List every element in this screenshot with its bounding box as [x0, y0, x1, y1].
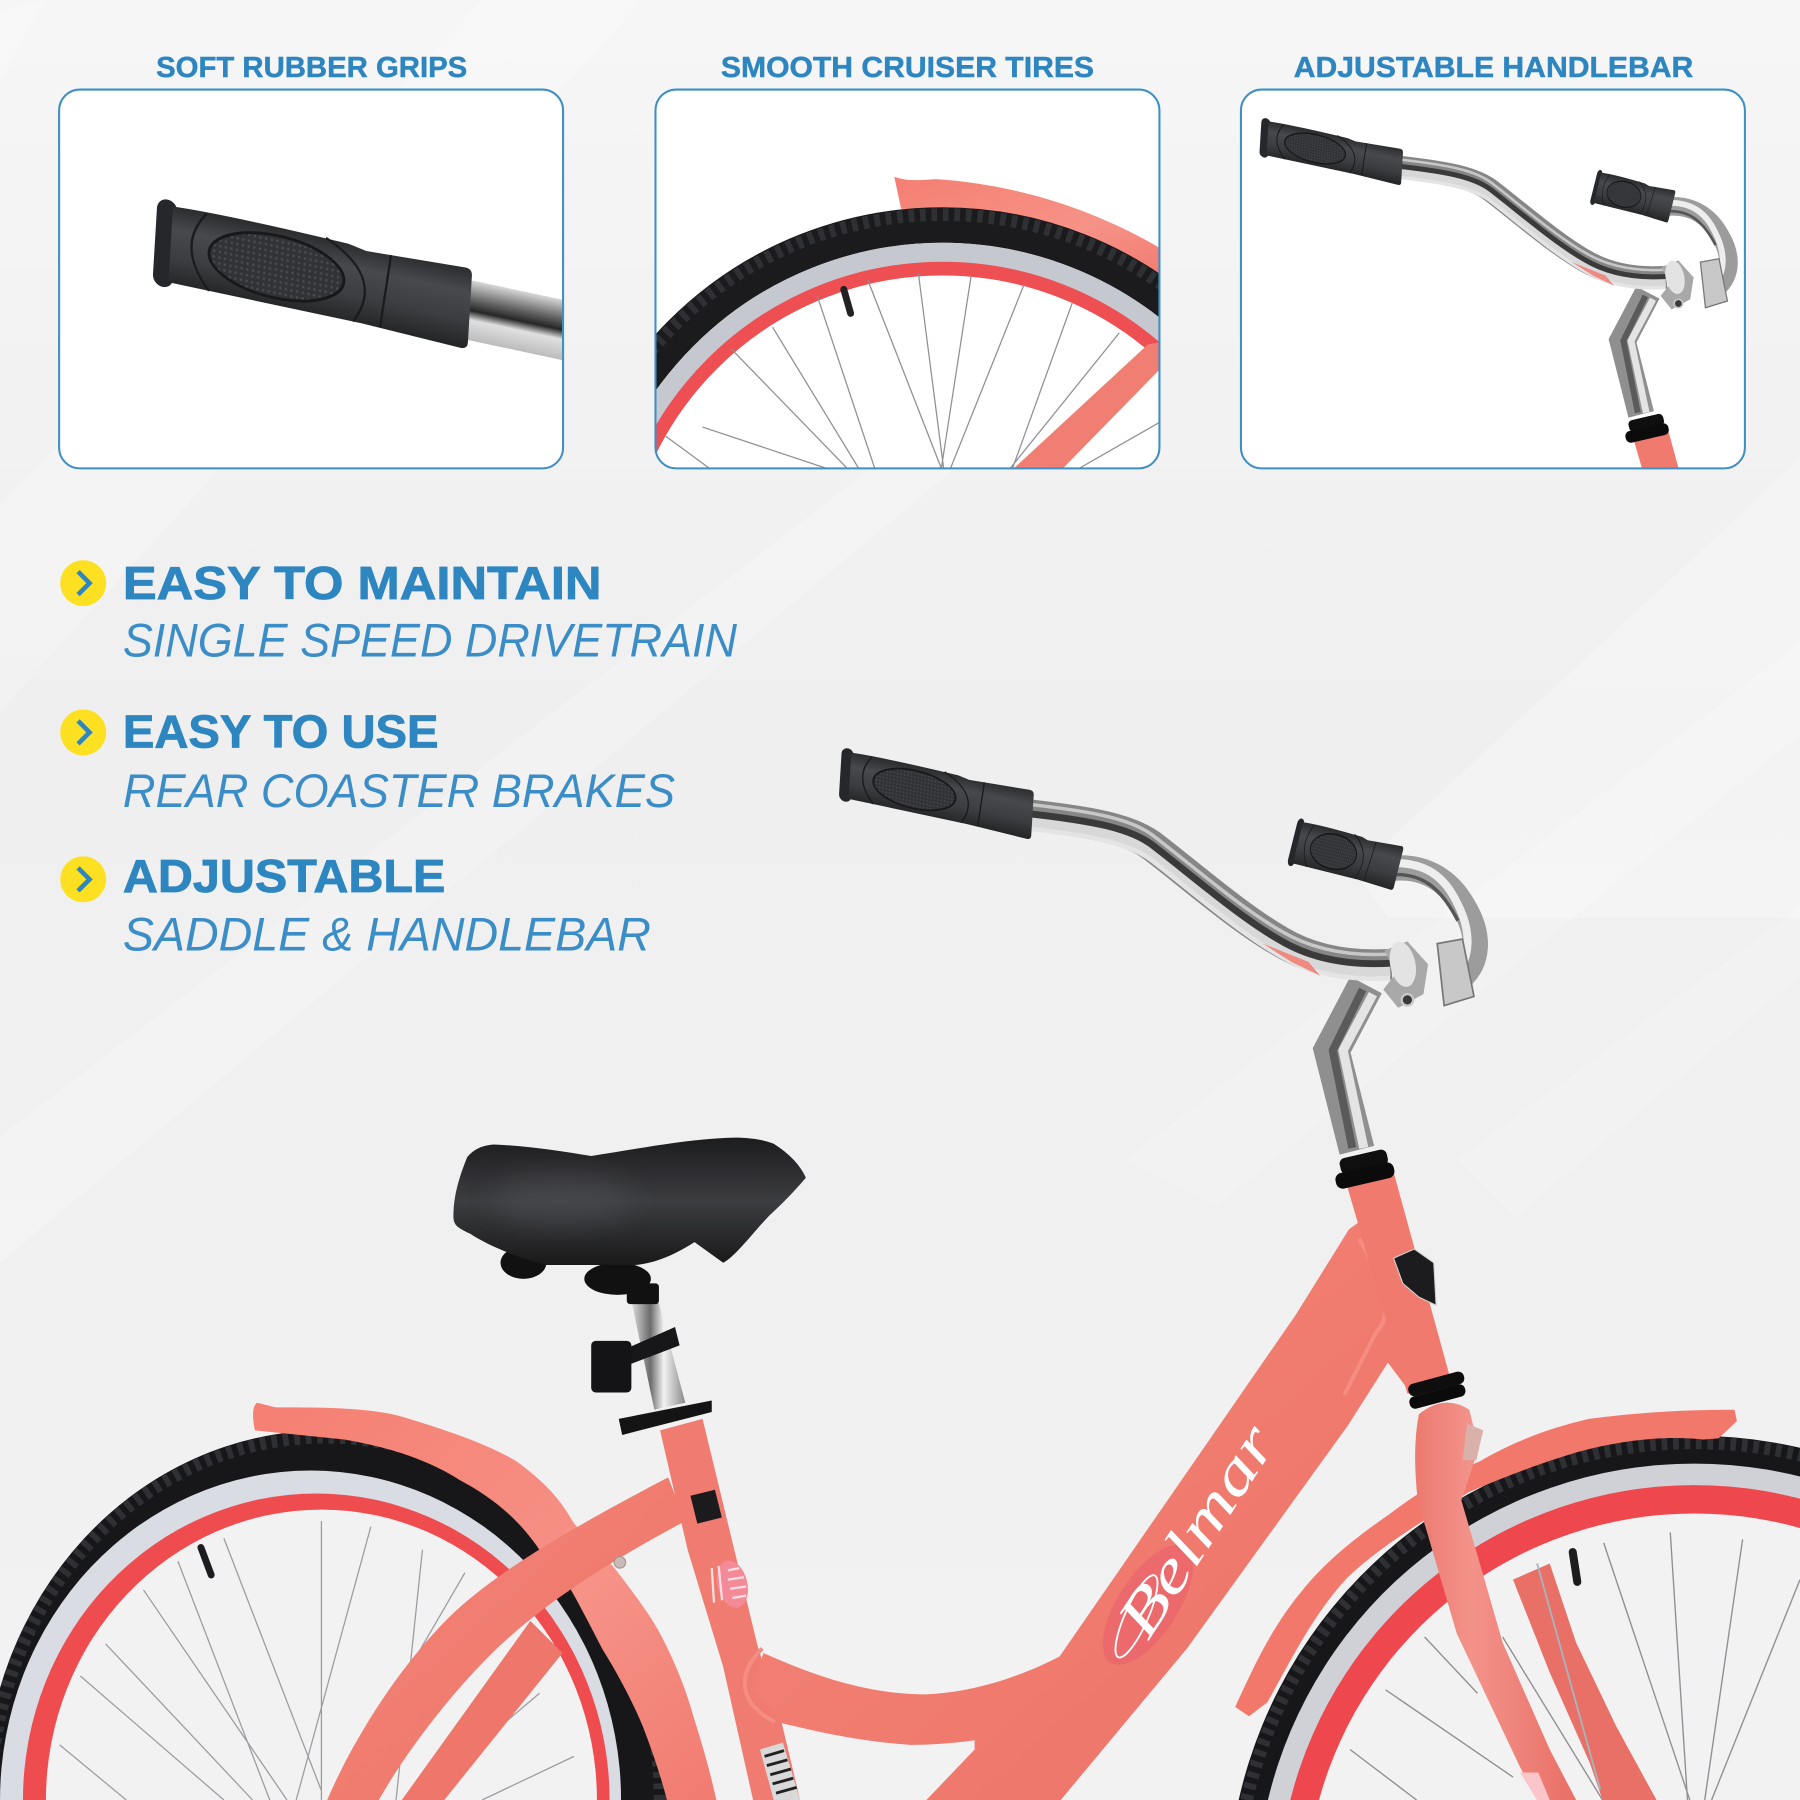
frame tube close-up: [1011, 342, 1162, 471]
logo: [1085, 1412, 1289, 1679]
head tube and handlebar: [839, 747, 1475, 1394]
rear reflector: [591, 1341, 631, 1392]
saddle sheen: [494, 1174, 631, 1225]
handlebar close-up: [1259, 117, 1728, 594]
feature: easy to use: EASY TO USE: [123, 705, 439, 757]
front fork leg: [1415, 1403, 1576, 1800]
heading: soft rubber grips: SOFT RUBBER GRIPS: [156, 52, 467, 84]
front wheel: [1239, 1436, 1800, 1800]
rear spokes: [60, 1521, 574, 1800]
icon: chevron bullet: [60, 709, 106, 755]
feature: easy to use: [60, 705, 675, 817]
seat tube: [660, 1419, 800, 1800]
front spokes: [1350, 1533, 1800, 1800]
grip close-up: [152, 197, 473, 352]
heading: adjustable handlebar: ADJUSTABLE HANDLEBAR: [1294, 52, 1694, 84]
fork bracket: [1462, 1423, 1483, 1460]
lower headset ring: [1407, 1370, 1467, 1410]
tire close-up: [656, 207, 1158, 390]
seat stay: [327, 1477, 685, 1800]
saddle: [453, 1138, 806, 1265]
safety label: [760, 1743, 800, 1800]
logo: Belmar: [1104, 1412, 1289, 1649]
valve stem: [844, 289, 851, 313]
feature: easy to use: REAR COASTER BRAKES: [123, 764, 675, 817]
seat tube badge: [712, 1557, 753, 1611]
feature: easy to maintain: EASY TO MAINTAIN: [123, 557, 602, 609]
valve stem: [1573, 1552, 1577, 1582]
second chain stay: [402, 1621, 562, 1800]
panel: smooth cruiser tires: [654, 88, 1160, 470]
main frame tube: [752, 1217, 1405, 1800]
rear fender: [253, 1403, 716, 1800]
fork spoke overlay: [1537, 1564, 1600, 1790]
bicycle: [0, 747, 1800, 1800]
chrome bar stub: [468, 280, 562, 360]
panel: soft rubber grips: [59, 90, 598, 468]
spokes close-up: [666, 273, 1159, 468]
frame weld detail: [745, 1239, 1388, 1722]
stay bolt: [614, 1557, 626, 1568]
panel: adjustable handlebar: [1240, 88, 1746, 470]
feature: adjustable: [60, 850, 651, 961]
fork sticker: [1520, 1772, 1550, 1800]
seat clamp: [619, 1401, 712, 1435]
icon: chevron bullet: [60, 856, 106, 902]
valve stem: [201, 1547, 211, 1575]
fender close-up: [894, 177, 1162, 281]
rear wheel: [0, 1430, 667, 1800]
feature: easy to maintain: SINGLE SPEED DRIVETRAIN: [123, 614, 737, 667]
icon: chevron bullet: [60, 560, 106, 606]
feature: adjustable: ADJUSTABLE: [123, 850, 445, 902]
heading: smooth cruiser tires: SMOOTH CRUISER TIRES: [721, 52, 1094, 84]
saddle springs: [501, 1247, 659, 1304]
front fender: [1235, 1410, 1737, 1716]
feature: adjustable: SADDLE & HANDLEBAR: [123, 908, 651, 961]
reflector bracket: [626, 1327, 680, 1364]
seat post: [631, 1295, 685, 1410]
rear fork leg: [1513, 1564, 1657, 1800]
feature: easy to maintain: [60, 557, 737, 667]
seat tube sticker: [690, 1490, 722, 1524]
head badge: [1394, 1249, 1436, 1305]
